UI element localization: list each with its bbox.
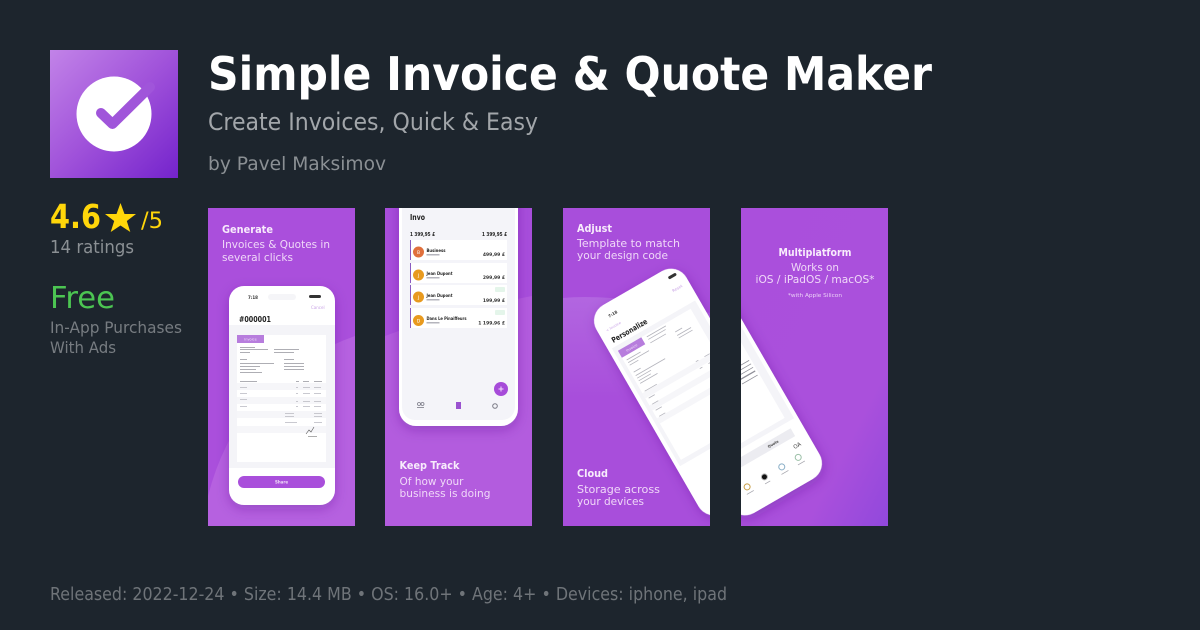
caption bottom: Cloud (577, 468, 608, 480)
colour swatches (743, 453, 802, 491)
purchase notes: With Ads (50, 338, 116, 357)
ratings count: 14 ratings (50, 237, 134, 258)
caption top: Adjust (577, 223, 612, 235)
phone mockup: 7:18 (248, 295, 258, 300)
screenshot 4: multiplatform (741, 208, 888, 526)
rotated phone continuation (741, 312, 826, 521)
caption: several clicks (222, 252, 293, 264)
rotated phone mockup: Reset (671, 283, 684, 293)
phone mockup: 1 399,95 £ (410, 232, 435, 238)
title: Simple Invoice & Quote Maker (208, 47, 932, 101)
invoice row: 299,99 £ (483, 275, 505, 281)
invoice row: B (417, 250, 420, 256)
developer: by Pavel Maksimov (208, 153, 386, 175)
purchase notes (50, 318, 182, 357)
invoice row: J (417, 295, 419, 301)
purchase notes: In-App Purchases (50, 318, 182, 337)
caption bottom: Storage across (577, 484, 660, 496)
caption top (576, 223, 680, 262)
invoice row: J (417, 273, 419, 279)
invoice row: Jean Dupont (426, 293, 453, 298)
invoice row (410, 308, 507, 328)
caption (222, 225, 330, 261)
rotated phone mockup: 7:18 (607, 309, 618, 319)
price: Free (50, 281, 115, 316)
caption: Multiplatform (778, 247, 852, 259)
invoice row: 1 199,96 £ (478, 320, 505, 326)
caption (756, 247, 874, 299)
footer metadata: Released: 2022-12-24 • Size: 14.4 MB • OS: 16.0+ • Age: 4+ • Devices: iphone, ipad (50, 584, 727, 605)
tab bar icons (417, 402, 497, 409)
invoice row: Business (426, 248, 446, 253)
invoice document: Invoice (244, 338, 257, 342)
share button (238, 476, 325, 488)
caption: Works on (791, 262, 839, 274)
screenshot 1: generate (208, 208, 355, 526)
rotated phone continuation: OA (793, 442, 803, 451)
invoice row: Dans Le Pinaiffeurs (426, 316, 467, 321)
rating: /5 (141, 209, 163, 234)
phone mockup (229, 286, 335, 505)
phone mockup (395, 208, 522, 434)
screenshot 2: keep track (385, 208, 532, 526)
caption (400, 460, 490, 500)
phone mockup: Cancel (311, 305, 325, 310)
rating: 4.6 (50, 197, 101, 236)
app icon (50, 50, 178, 178)
invoice row: 199,99 £ (483, 298, 505, 304)
caption top: Template to match (576, 238, 680, 250)
rotated phone mockup: Personalize (610, 317, 649, 345)
invoice document (237, 335, 326, 462)
caption: *with Apple Silicon (788, 293, 843, 299)
caption bottom: your devices (577, 496, 644, 508)
caption: iOS / iPadOS / macOS* (756, 274, 874, 286)
invoice row (410, 240, 507, 260)
phone mockup: 1 399,95 £ (482, 232, 507, 238)
rating (50, 197, 163, 236)
invoice row (410, 285, 507, 305)
rotated phone mockup: Invoice (625, 343, 638, 353)
share button: Share (275, 480, 288, 484)
subtitle: Create Invoices, Quick & Easy (208, 108, 538, 136)
invoice row (410, 263, 507, 283)
caption: Invoices & Quotes in (222, 239, 330, 251)
caption top: your design code (577, 250, 668, 262)
phone mockup: Invo (410, 213, 425, 222)
screenshot 3: adjust (563, 208, 710, 526)
invoice row: 499,99 £ (483, 252, 505, 258)
rotated phone mockup: < Invoice (605, 321, 622, 333)
invoice row: D (417, 318, 421, 324)
rotated phone continuation: Quote (767, 439, 780, 449)
invoice row: Jean Dupont (426, 271, 453, 276)
caption: Keep Track (400, 460, 460, 472)
phone mockup: #000001 (239, 315, 271, 324)
caption: Generate (222, 224, 273, 236)
caption: Of how your (400, 476, 464, 488)
caption: business is doing (400, 488, 490, 500)
add button (494, 382, 508, 396)
rotated phone mockup (593, 268, 710, 520)
caption bottom (577, 468, 660, 508)
